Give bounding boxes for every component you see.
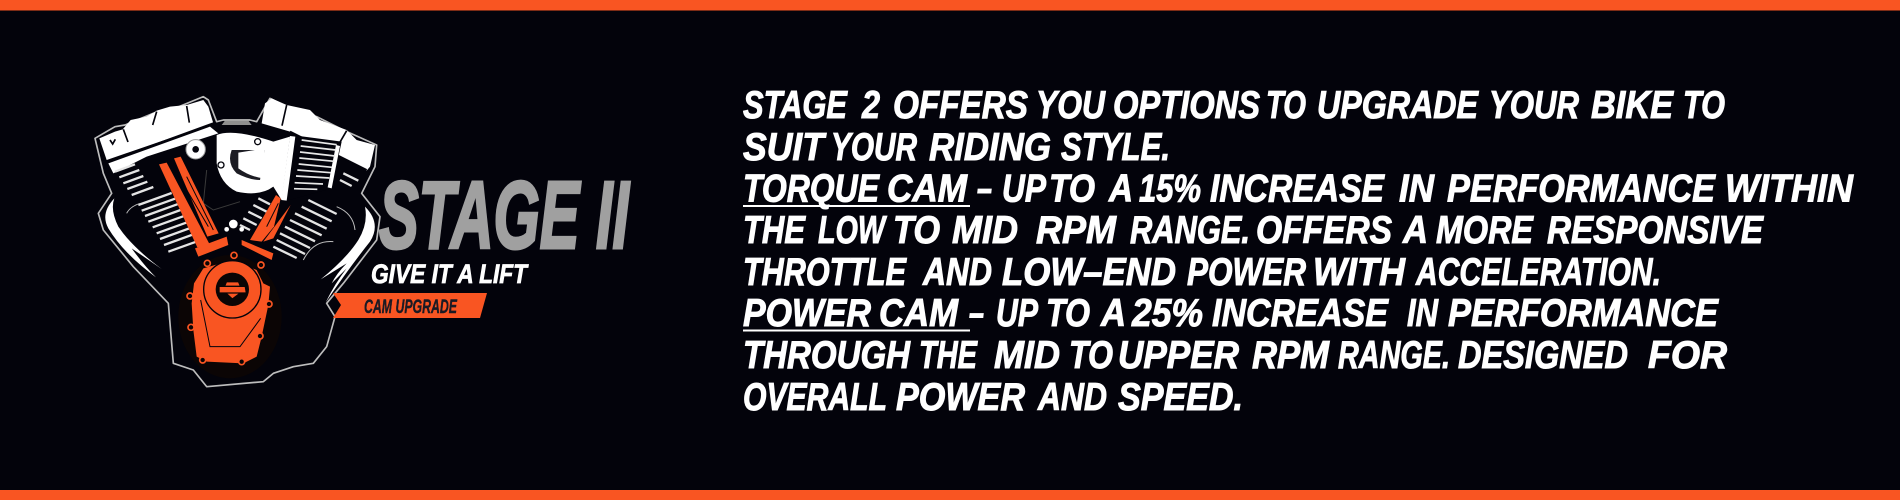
torque cam line 3 <box>743 251 1661 294</box>
intro line 2: SUIT <box>743 126 827 169</box>
power cam line 2: TO <box>1069 334 1113 377</box>
bottom orange bar <box>0 490 1900 500</box>
intro line 2: STYLE. <box>1061 126 1170 169</box>
intro line 2: YOUR <box>831 126 917 169</box>
intro line 1: YOU <box>1036 84 1106 127</box>
power cam line 1: PERFORMANCE <box>1448 292 1719 335</box>
body text block <box>743 84 1854 419</box>
torque cam line 2: RESPONSIVE <box>1547 209 1764 252</box>
power cam line 1: IN <box>1407 292 1439 335</box>
torque cam line 1: 15% <box>1139 168 1201 210</box>
torque cam line 2: A <box>1402 209 1428 252</box>
torque cam underline <box>743 205 970 207</box>
power cam underline <box>743 330 970 332</box>
power cam line 2: THROUGH <box>743 334 911 377</box>
orange cam upgrade banner: CAM UPGRADE <box>364 297 458 318</box>
power cam line 3: AND <box>1037 376 1107 419</box>
torque cam line 3: POWER <box>1187 251 1306 294</box>
torque cam line 2: RANGE. <box>1130 209 1250 252</box>
power cam line 2 <box>743 334 1727 377</box>
power cam line 1: TO <box>1046 292 1090 335</box>
torque cam line 2: RPM <box>1036 209 1117 252</box>
power cam line 2: THE <box>919 334 978 377</box>
torque cam line 3: THROTTLE <box>743 251 907 294</box>
intro line 1: TO <box>1266 84 1306 127</box>
torque cam line 3: ACCELERATION. <box>1415 251 1661 294</box>
power cam line 3: POWER <box>896 376 1025 419</box>
intro line 1: OFFERS <box>893 84 1028 127</box>
torque cam line 1: INCREASE <box>1210 168 1385 210</box>
intro line 1: TO <box>1683 84 1725 127</box>
torque cam line 1: PERFORMANCE <box>1447 168 1716 210</box>
torque cam line 1: IN <box>1399 168 1435 210</box>
intro line 1: OPTIONS <box>1113 84 1260 127</box>
logo tagline: give it a lift: GIVE IT A LIFT <box>371 259 529 289</box>
torque cam line 1: A <box>1108 168 1133 210</box>
power cam line 1: CAM <box>879 292 959 335</box>
torque cam line 2: THE <box>743 209 806 252</box>
power cam line 1: INCREASE <box>1212 292 1389 335</box>
torque cam line 2: MID <box>952 209 1018 252</box>
torque cam line 1 <box>743 168 1854 210</box>
power cam line 2: RPM <box>1252 334 1330 377</box>
torque cam line 1: TORQUE <box>743 168 880 210</box>
top orange bar <box>0 0 1900 10</box>
torque cam line 1: WITHIN <box>1725 168 1854 210</box>
intro line 1: 2 <box>861 84 880 127</box>
intro line 1: UPGRADE <box>1317 84 1479 127</box>
intro line 1: BIKE <box>1591 84 1674 127</box>
power cam line 1: UP <box>996 292 1038 335</box>
power cam line 1: A <box>1100 292 1126 335</box>
intro line 2: RIDING <box>929 126 1051 169</box>
torque cam line 3: AND <box>922 251 992 294</box>
power cam line 2: DESIGNED <box>1458 334 1628 377</box>
logo: STAGE II: STAGE II <box>379 162 630 269</box>
power cam line 1 <box>743 292 1719 335</box>
power cam line 2: MID <box>994 334 1060 377</box>
intro line 1: STAGE <box>743 84 848 127</box>
power cam line 3: SPEED. <box>1118 376 1243 419</box>
power cam line 1: POWER <box>743 292 871 335</box>
intro line 1: YOUR <box>1489 84 1579 127</box>
power cam line 1: 25% <box>1131 292 1203 335</box>
torque cam line 2: TO <box>893 209 940 252</box>
intro line 1 <box>743 84 1725 127</box>
torque cam line 2: MORE <box>1436 209 1534 252</box>
torque cam line 2: LOW <box>818 209 888 252</box>
power cam line 2: UPPER <box>1118 334 1239 377</box>
intro line 2 <box>743 126 1170 169</box>
torque cam line 1: TO <box>1049 168 1095 210</box>
power cam line 1: – <box>969 292 984 335</box>
torque cam line 1: – <box>977 168 992 210</box>
torque cam line 1: CAM <box>887 168 968 210</box>
torque cam line 2: OFFERS <box>1256 209 1392 252</box>
torque cam line 1: UP <box>1002 168 1046 210</box>
power cam line 2: RANGE. <box>1338 334 1450 377</box>
torque cam line 3: WITH <box>1313 251 1406 294</box>
power cam line 2: FOR <box>1648 334 1727 377</box>
power cam line 3: OVERALL <box>743 376 887 419</box>
orange cam upgrade banner <box>333 293 487 318</box>
torque cam line 2 <box>743 209 1764 252</box>
torque cam line 3: LOW–END <box>1002 251 1176 294</box>
power cam line 3 <box>743 376 1243 419</box>
icon: engine illustration <box>95 97 380 387</box>
